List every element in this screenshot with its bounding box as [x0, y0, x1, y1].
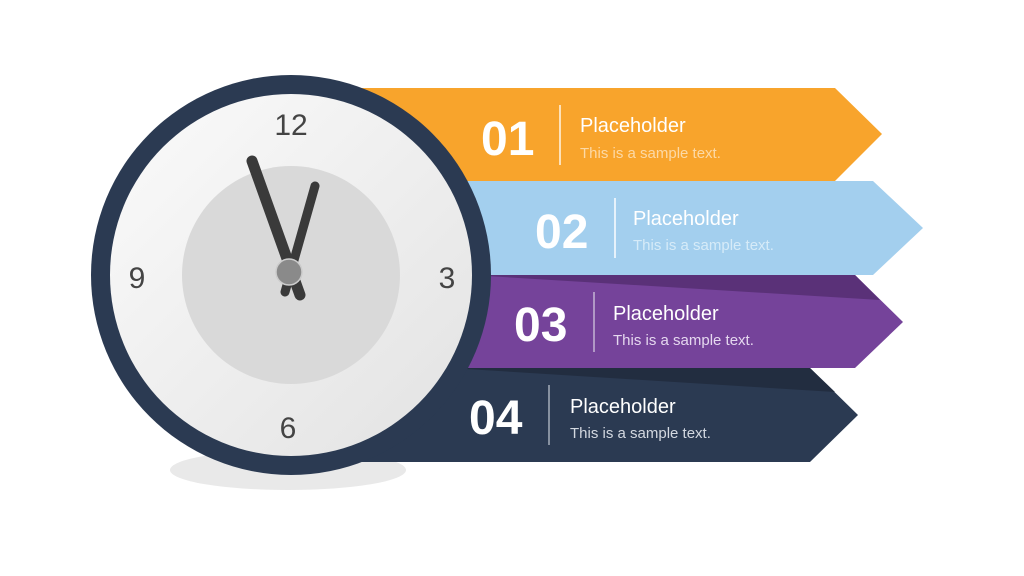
- band 04: [290, 368, 858, 462]
- band 01: This is a sample text.: [580, 145, 721, 162]
- clock numbers: [129, 109, 455, 445]
- clock numbers: 9: [129, 262, 145, 295]
- band 02: 02: [535, 206, 588, 259]
- band 04: This is a sample text.: [570, 425, 711, 442]
- band 01: Placeholder: [580, 115, 686, 137]
- center pin: [276, 259, 302, 285]
- clock: [91, 75, 491, 475]
- band 01: 01: [481, 113, 534, 166]
- band 02: This is a sample text.: [633, 237, 774, 254]
- band 03: 03: [514, 299, 567, 352]
- band 03: This is a sample text.: [613, 332, 754, 349]
- band 02: [290, 181, 923, 275]
- band 03: Placeholder: [613, 303, 719, 325]
- band 01: [290, 88, 882, 181]
- band 02: Placeholder: [633, 208, 739, 230]
- clock hands: [252, 161, 315, 295]
- band 04: 04: [469, 392, 523, 445]
- band 03: [290, 275, 903, 368]
- band 04: Placeholder: [570, 396, 676, 418]
- clock shadow: [170, 450, 406, 490]
- clock numbers: 12: [274, 109, 308, 142]
- clock numbers: 6: [280, 412, 296, 445]
- clock numbers: 3: [439, 262, 455, 295]
